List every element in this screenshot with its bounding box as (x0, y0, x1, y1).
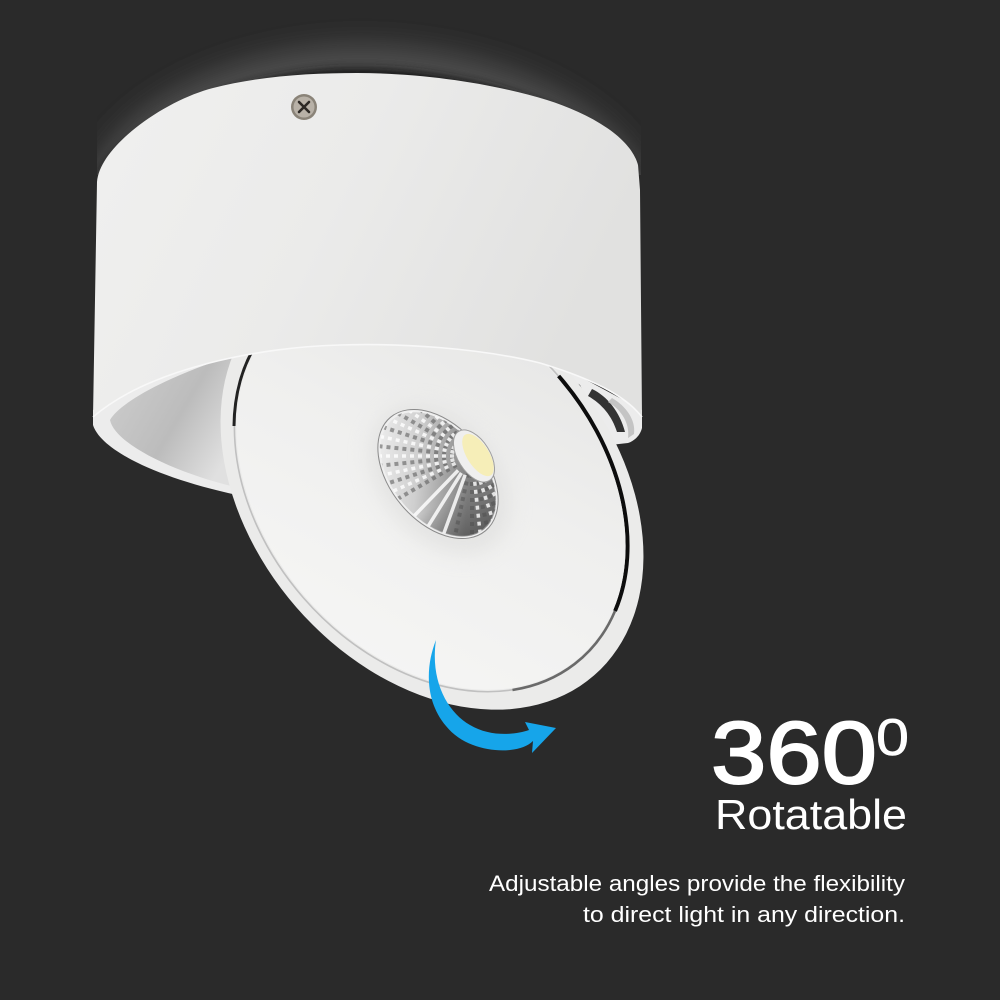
mounting screw (291, 94, 317, 120)
rotation arrow (429, 640, 556, 753)
rim highlight (93, 345, 642, 417)
rotating disc outer ring (134, 184, 730, 794)
description text (489, 871, 906, 927)
lower lip of housing (93, 340, 262, 495)
headline: 360 degrees (711, 703, 909, 802)
number: 360 (711, 703, 877, 802)
LED mount (445, 423, 503, 489)
LED reflector lens (377, 409, 499, 539)
bright fold lines (414, 469, 467, 534)
ceiling glow and shadow (97, 36, 641, 175)
front disc (157, 207, 705, 767)
description text: Adjustable angles provide the flexibility (489, 871, 906, 896)
degree sign: 0 (876, 709, 909, 767)
LED chip (456, 429, 500, 481)
ring gap, right black slit (234, 337, 628, 690)
spotlight fixture (92, 73, 644, 710)
dark facets (380, 412, 496, 536)
lens lower shading (420, 480, 496, 537)
recess around lens (342, 378, 538, 582)
inner cavity of housing (110, 355, 240, 488)
subheading: Rotatable: Rotatable (715, 791, 907, 838)
cylinder housing (93, 73, 642, 417)
bright facets (380, 412, 496, 533)
description text: to direct light in any direction. (583, 902, 905, 927)
rear swivel ring (540, 355, 642, 445)
ring gap, lower light section (154, 204, 708, 770)
